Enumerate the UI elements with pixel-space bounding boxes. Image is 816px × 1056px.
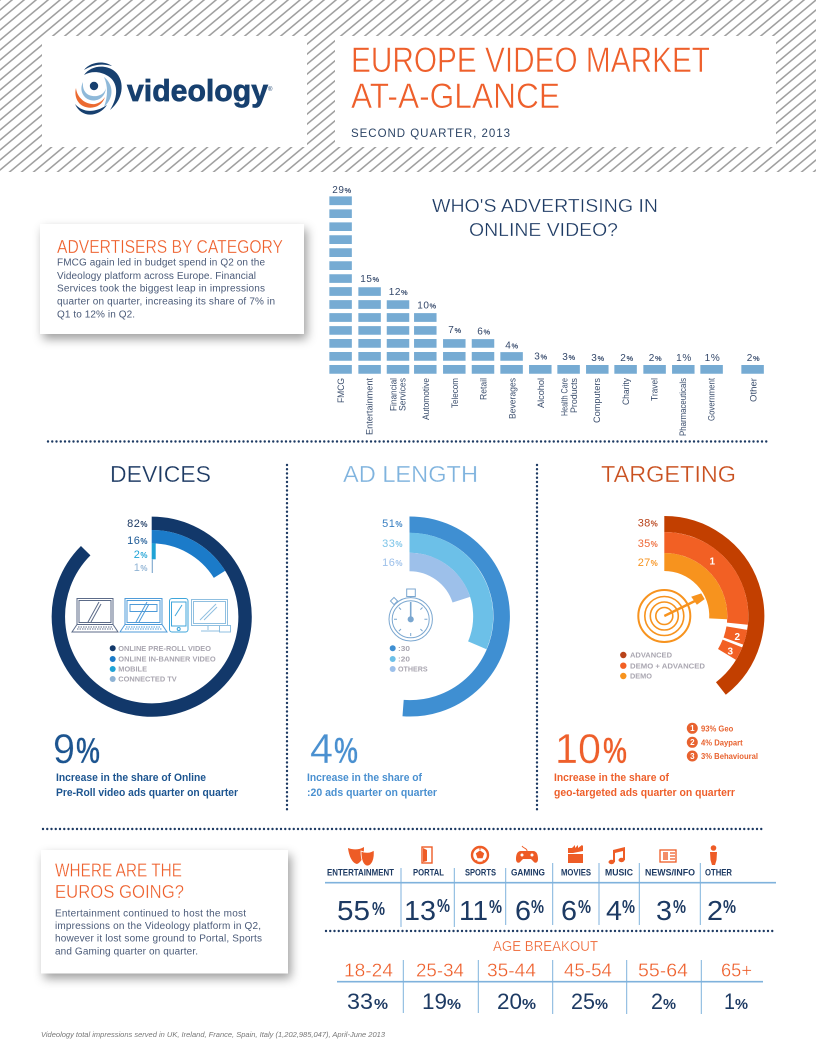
bar chart: advertisers by category: Charity (621, 378, 631, 405)
bar chart: advertisers by category: Other (748, 378, 758, 402)
text block: Q1 to 12% in Q2. (57, 310, 135, 321)
panel: title (335, 36, 776, 147)
category values: 13 (404, 895, 436, 926)
category values: % (531, 897, 544, 917)
heading: who's advertising: WHO'S ADVERTISING IN (432, 195, 658, 216)
bar chart: advertisers by category: Products (569, 378, 579, 413)
heading: DEVICES (110, 461, 211, 487)
bar chart: advertisers by category: Travel (650, 378, 660, 401)
ad length legend: :30 (398, 644, 410, 653)
column headers: NEWS/INFO (645, 868, 695, 879)
donut chart: ad length (403, 525, 502, 708)
icon: portal door (422, 847, 432, 863)
age ranges: 65+ (721, 960, 752, 981)
text block: Entertainment continued to host the most (55, 909, 246, 920)
panel: targeting (554, 461, 758, 799)
targeting legend: ADVANCED (630, 651, 673, 660)
category values: 3 (656, 895, 672, 926)
title: EUROPE VIDEO MARKET (351, 41, 710, 80)
segment numbers (710, 556, 741, 658)
text block (57, 258, 275, 321)
icon: laptop in-banner (120, 598, 167, 632)
donut chart: devices (58, 523, 245, 710)
column headers: OTHER (705, 868, 732, 879)
bar chart: advertisers by category: Services (398, 378, 408, 411)
targeting percent labels (638, 518, 658, 569)
age values: 20 (497, 989, 522, 1014)
heading: AGE BREAKOUT (493, 938, 598, 955)
bar chart: advertisers by category: 3% (591, 353, 605, 364)
targeting breakdown legend: 4% Daypart (701, 738, 743, 748)
text block (55, 909, 262, 958)
category values: 55 (337, 895, 370, 926)
header hatched band (0, 0, 816, 172)
category values: % (372, 899, 385, 919)
bar chart: advertisers by category: Telecom (450, 378, 460, 408)
icon: soccer ball (472, 847, 488, 863)
text block: however it lost some ground to Portal, Sports (55, 934, 262, 945)
stat: 9%: Pre-Roll video ads quarter on quarter (56, 787, 239, 799)
icon: videology swirl (75, 63, 122, 115)
targeting legend: DEMO + ADVANCED (630, 661, 706, 670)
devices legend: ONLINE IN-BANNER VIDEO (118, 655, 216, 664)
age values: 19 (422, 989, 447, 1014)
targeting legend: DEMO (630, 672, 652, 681)
bar chart: advertisers by category: Automotive (421, 378, 431, 420)
bar chart: advertisers by category (332, 185, 760, 436)
category values: 6 (515, 895, 531, 926)
targeting percent labels: 38% (638, 518, 658, 530)
ad length percent labels (382, 518, 403, 569)
table: content categories (325, 845, 776, 927)
category values: 11 (459, 895, 488, 926)
bar chart: advertisers by category: Entertainment (364, 377, 374, 435)
column headers: ENTERTAINMENT (327, 868, 394, 879)
segment numbers: 1 (710, 556, 716, 568)
bar chart: advertisers by category: Pharmaceuticals (678, 378, 688, 436)
panel: ad length (307, 461, 502, 799)
heading: WHERE ARE THE (55, 861, 182, 881)
heading: who's advertising: ONLINE VIDEO? (469, 219, 618, 240)
category values: 2 (707, 895, 723, 926)
icon: phone (170, 598, 188, 632)
segment numbers: 2 (735, 632, 741, 643)
ad length percent labels: 51% (382, 518, 403, 530)
age values: 1 (724, 989, 735, 1014)
targeting percent labels: 35% (638, 538, 658, 550)
category values: % (437, 896, 450, 916)
donut chart: targeting (664, 524, 756, 688)
age ranges: 35-44 (487, 960, 536, 981)
targeting breakdown legend: 3% Behavioural (701, 751, 758, 761)
icon: theatre masks (348, 847, 374, 866)
icon: laptop pre-roll (72, 598, 118, 632)
heading: ADVERTISERS BY CATEGORY (57, 237, 283, 257)
text block: and Gaming quarter on quarter. (55, 947, 198, 958)
stat: 4%: Increase in the share of (307, 772, 422, 784)
panel: where are the euros going (41, 850, 288, 974)
devices legend: CONNECTED TV (118, 675, 177, 684)
text block: quarter on quarter, increasing its share of 7% in (57, 296, 275, 307)
bar chart: advertisers by category: Computers (592, 377, 602, 423)
targeting legend (620, 651, 706, 681)
title line 2: AT-A-GLANCE (351, 77, 560, 116)
targeting breakdown legend: 3 (690, 752, 695, 761)
logo wordmark: videology (127, 73, 269, 108)
panel: advertisers by category (40, 224, 304, 334)
age values: 33 (347, 989, 373, 1014)
bar chart: advertisers by category: 3% (562, 352, 576, 363)
targeting breakdown legend: 1 (690, 724, 695, 733)
category values: % (622, 897, 635, 917)
category values: 6 (561, 895, 577, 926)
column headers: SPORTS (465, 868, 496, 879)
stat: 9% (53, 725, 239, 799)
category values: 4 (606, 895, 622, 926)
age values: 2 (651, 989, 663, 1014)
age ranges: 55-64 (638, 960, 688, 981)
bar chart: advertisers by category: Financial (388, 378, 398, 411)
age values (347, 989, 748, 1014)
category values: % (578, 897, 591, 917)
bar chart: advertisers by category: FMCG (336, 378, 346, 403)
ad length legend (390, 644, 428, 674)
icon: music note (608, 847, 625, 864)
text block: Videology platform across Europe. Financial (57, 271, 256, 282)
icon: gamepad (516, 846, 538, 863)
icon: target and arrow (638, 590, 704, 642)
column headers (327, 868, 732, 879)
device percent labels: 82% (127, 518, 148, 530)
age values: % (374, 996, 388, 1013)
stat: 4%: :20 ads quarter on quarter (307, 787, 438, 799)
stat: 10%: geo-targeted ads quarter on quarterr (554, 787, 736, 799)
age values: 25 (571, 989, 595, 1014)
targeting breakdown legend: 2 (690, 738, 695, 747)
category values: % (489, 897, 502, 917)
age values: % (663, 996, 676, 1013)
stat: 4%: % (334, 730, 358, 771)
ad length legend: OTHERS (398, 665, 428, 674)
panel: logo (42, 36, 307, 147)
bar chart: advertisers by category: 2% (649, 353, 662, 364)
table: age breakout (337, 938, 763, 1014)
bar chart: advertisers by category: Alcohol (536, 378, 546, 408)
column headers: PORTAL (413, 868, 444, 879)
category values: % (673, 897, 686, 917)
bar chart: advertisers by category: Government (706, 378, 716, 421)
icon: stopwatch (389, 589, 432, 641)
bar chart: advertisers by category: Retail (478, 378, 488, 400)
registered mark: ® (268, 86, 273, 93)
bar chart: advertisers by category: 12% (389, 287, 408, 298)
age values: % (595, 996, 608, 1013)
targeting percent labels: 27% (638, 557, 658, 569)
column headers: MOVIES (561, 868, 591, 879)
age values: % (522, 996, 536, 1013)
stat: 9%: 9 (53, 725, 75, 772)
segment numbers: 3 (728, 646, 734, 658)
age ranges: 18-24 (344, 960, 393, 981)
age ranges: 25-34 (416, 960, 464, 981)
text block: Services took the biggest leap in impressions (57, 284, 265, 295)
age values: % (735, 996, 748, 1013)
bar chart: advertisers by category: 1% (676, 353, 692, 364)
subtitle: SECOND QUARTER, 2013 (351, 128, 510, 140)
category values: % (723, 897, 736, 917)
stat: 10%: % (603, 730, 627, 771)
bar chart: advertisers by category: 3% (534, 352, 548, 362)
icon: clapperboard (568, 845, 583, 863)
age values: % (447, 996, 461, 1013)
bar chart: advertisers by category: 2% (747, 353, 760, 364)
icon: person (710, 845, 717, 865)
devices legend: MOBILE (118, 665, 147, 674)
targeting breakdown legend (687, 723, 758, 762)
age ranges (344, 960, 752, 981)
stat: 10%: 10 (555, 725, 601, 772)
category values (337, 895, 736, 926)
text block: impressions on the Videology platform in Q2, (55, 921, 261, 932)
bar chart: advertisers by category: 1% (705, 353, 720, 364)
bar chart: advertisers by category: 4% (505, 340, 519, 352)
stat: 9%: Increase in the share of Online (56, 772, 206, 784)
bar chart: advertisers by category: Beverages (508, 378, 518, 419)
stat: 4%: 4 (310, 725, 333, 772)
ad length percent labels: 33% (382, 538, 403, 550)
stat: 9%: % (76, 730, 100, 771)
stat: 10% (554, 725, 736, 799)
age ranges: 45-54 (564, 960, 612, 981)
bar chart: advertisers by category: 2% (620, 353, 634, 364)
targeting breakdown legend: 93% Geo (701, 724, 733, 734)
stat: 10%: Increase in the share of (554, 772, 669, 784)
icon: connected tv (192, 600, 230, 632)
device percent labels: 16% (127, 535, 148, 547)
stat: 4% (307, 725, 438, 799)
device percent labels: 2% (134, 549, 148, 561)
bar chart: advertisers by category: 15% (360, 274, 380, 285)
ad length percent labels: 16% (382, 557, 403, 569)
panel: devices (53, 461, 245, 799)
ad length legend: :20 (398, 655, 410, 664)
footnote: Videology total impressions served in UK, Ireland, France, Spain, Italy (1,202,985,047), April-June 2013 (41, 1030, 386, 1039)
device percent labels: 1% (134, 562, 148, 574)
column headers: GAMING (511, 868, 545, 879)
panel: where are the euros going: EUROS GOING? (55, 882, 184, 902)
heading: AD LENGTH (343, 461, 478, 487)
bar chart: advertisers by category: 10% (417, 300, 437, 312)
heading: who's advertising (432, 195, 658, 240)
icon: newspaper (660, 850, 676, 862)
column headers: MUSIC (605, 868, 633, 879)
heading: TARGETING (601, 461, 736, 487)
bar chart: advertisers by category: 29% (332, 185, 352, 196)
devices legend: ONLINE PRE-ROLL VIDEO (118, 644, 211, 653)
bar chart: advertisers by category: Health Care (560, 378, 570, 416)
bar chart: advertisers by category: 6% (477, 326, 491, 338)
device percent labels (127, 518, 148, 574)
devices legend (110, 644, 216, 684)
bar chart: advertisers by category: 7% (448, 325, 462, 336)
text block: FMCG again led in budget spend in Q2 on the (57, 258, 265, 269)
